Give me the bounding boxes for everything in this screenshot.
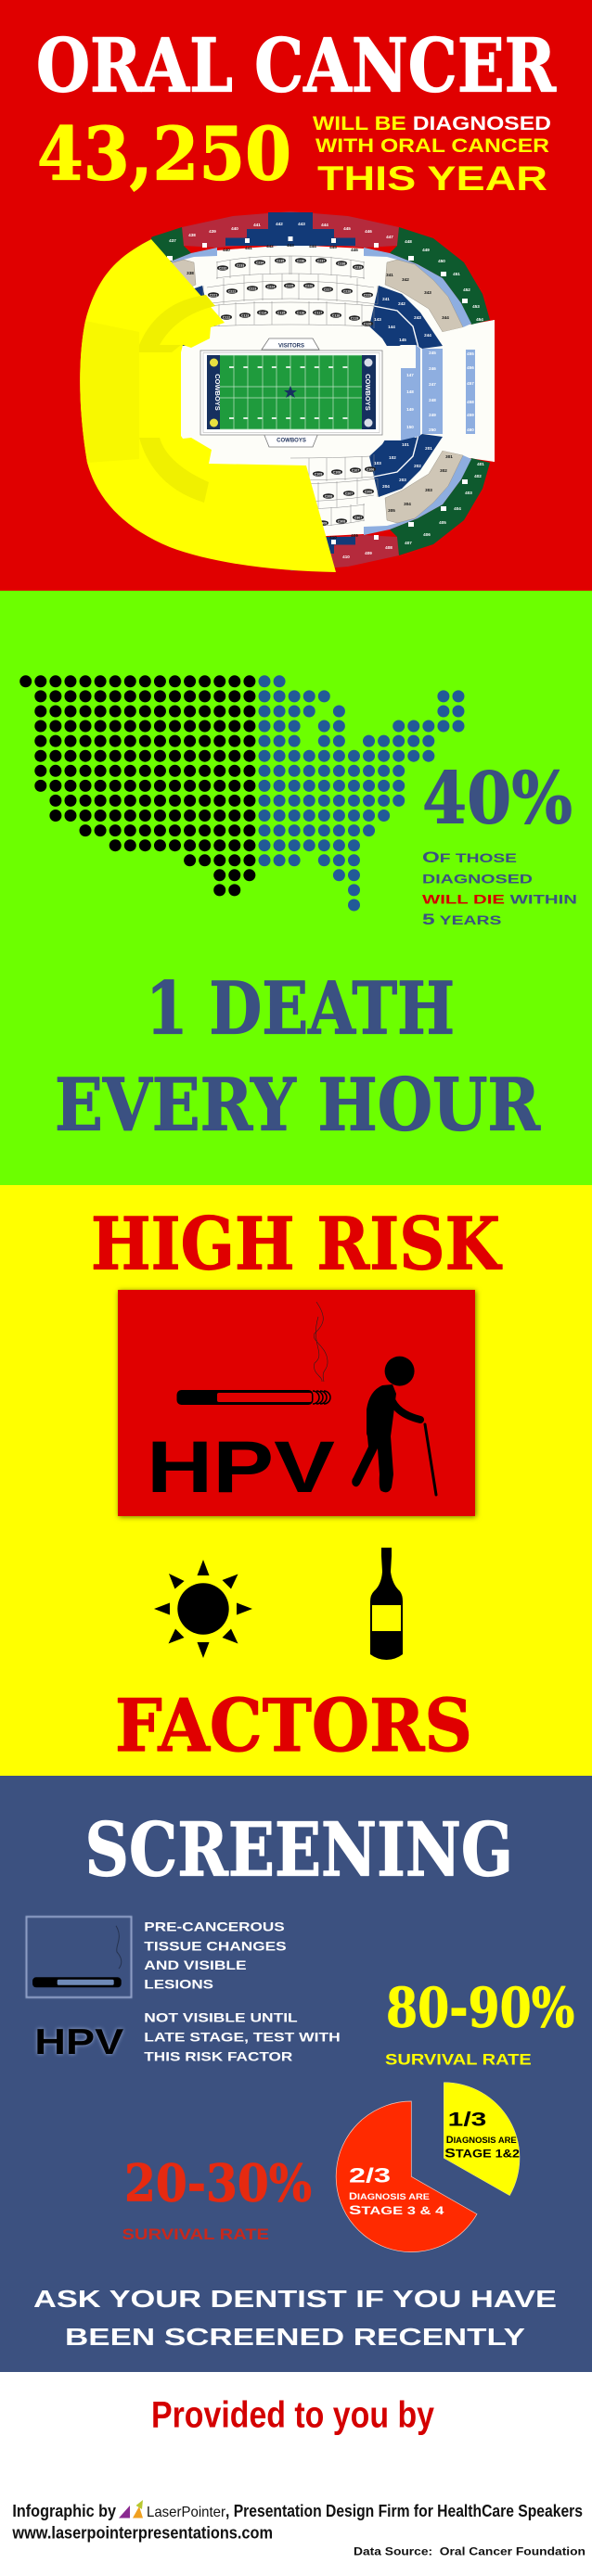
stadium seating map: 449: [422, 248, 430, 252]
stadium seating map: 248: [429, 398, 436, 402]
stadium seating map: 147: [406, 373, 414, 377]
call to action: ASK YOUR DENTIST IF YOU HAVE: [33, 2285, 557, 2313]
stadium seating map: 145: [399, 338, 406, 342]
stadium seating map: 441: [253, 223, 261, 227]
pie slice: stage 1 and 2: 1/3: [448, 2109, 486, 2130]
stadium seating map: 341: [386, 273, 393, 277]
call to action: [33, 2285, 557, 2351]
icon: elderly person with cane: [352, 1357, 436, 1495]
pie slice: stage 3 and 4: DIAGNOSIS ARE: [349, 2191, 430, 2202]
stadium seating map: 437: [169, 238, 176, 243]
HPV label: HPV: [34, 2022, 123, 2062]
stadium seating map: C308: [338, 519, 345, 523]
stadium seating map: 146: [407, 346, 415, 351]
stadium seating map: 450: [438, 259, 445, 263]
statistic caption: THIS YEAR: [317, 159, 547, 198]
stadium seating map: [80, 211, 495, 572]
stadium seating map: C115: [277, 311, 285, 314]
stadium seating map: 242: [398, 301, 405, 306]
stadium seating map: 442: [276, 222, 283, 226]
stadium seating map: 249: [429, 413, 436, 417]
screening notes: LATE STAGE, TEST WITH: [144, 2030, 341, 2045]
stadium seating map: 202: [414, 464, 421, 468]
stadium seating map: 438: [188, 233, 196, 237]
stadium seating map: C117: [315, 311, 322, 314]
blue dots: 40 percent: [264, 682, 458, 905]
stadium seating map: 402: [474, 474, 482, 478]
stadium seating map: C225: [286, 284, 293, 287]
panel: footer credits: [0, 2372, 592, 2576]
pie slice: stage 3 and 4: 2/3: [349, 2163, 391, 2187]
pie slice: stage 1 and 2: [444, 2083, 520, 2196]
stadium seating map: 343: [424, 290, 431, 295]
stadium seating map: C120: [364, 322, 371, 325]
stadium seating map: 150: [406, 425, 414, 429]
credit line: Infographic by: [12, 2501, 117, 2520]
stadium seating map: C235: [277, 259, 284, 262]
mortality caption: [422, 848, 577, 928]
statistic: 20-30% survival: [122, 2154, 312, 2243]
heading: factors: FACTORS: [115, 1684, 472, 1768]
stadium seating map: C107: [352, 468, 359, 472]
stadium seating map: C237: [317, 259, 325, 262]
stadium seating map: 410: [329, 535, 337, 540]
stadium seating map: 459: [467, 413, 474, 417]
panel: mortality: [0, 591, 592, 1185]
stadium seating map: 144: [388, 325, 395, 329]
pie slice: stage 3 and 4: S TAGE 3 & 4: [349, 2202, 444, 2217]
stadium seating map: 443: [287, 243, 294, 248]
stadium seating map: C113: [241, 313, 249, 317]
icon: bottle: [370, 1548, 403, 1660]
stadium seating map: 401: [477, 462, 484, 466]
mortality caption: 5 YEARS: [422, 911, 501, 928]
stadium seating map: 204: [382, 484, 390, 489]
stadium seating map: 245: [429, 351, 436, 355]
screening notes: THIS RISK FACTOR: [144, 2048, 292, 2063]
screening notes: TISSUE CHANGES: [144, 1938, 287, 1953]
stadium seating map: 148: [406, 389, 414, 394]
stadium seating map: 246: [429, 366, 436, 371]
stadium seating map: 406: [423, 532, 431, 537]
stadium seating map: C221: [210, 293, 217, 297]
mortality caption: O F THOSE: [422, 848, 517, 866]
stadium seating map: C206: [365, 490, 372, 493]
pie slice: stage 1 and 2: DIAGNOSIS ARE: [446, 2135, 517, 2146]
stadium seating map: 338: [187, 271, 194, 275]
stadium seating map: 305: [388, 508, 395, 513]
stadium seating map: 302: [440, 468, 447, 473]
heading: high risk: HIGH RISK: [91, 1202, 503, 1287]
stadium seating map: C112: [223, 315, 230, 319]
stadium seating map: COWBOYS: [213, 374, 222, 411]
stadium seating map: 244: [424, 333, 431, 338]
icon: sun: [154, 1560, 252, 1658]
statistic: 80-90% survival: [385, 1975, 574, 2069]
stadium seating map: 404: [454, 506, 461, 511]
stadium seating map: 410: [342, 555, 350, 559]
statistic: 40%: 40%: [422, 757, 573, 840]
dot map of the United States: [26, 682, 458, 905]
stadium seating map: 441: [245, 246, 252, 250]
stadium seating map: 405: [439, 520, 446, 525]
stadium seating map: 440: [223, 248, 230, 252]
stadium seating map: 457: [467, 381, 474, 386]
stadium seating map: C226: [305, 284, 313, 287]
statistic: 80-90% survival: SURVIVAL RATE: [385, 2051, 532, 2069]
call to action: BEEN SCREENED RECENTLY: [65, 2323, 525, 2351]
statistic: 20-30% survival: SURVIVAL RATE: [122, 2225, 269, 2243]
stadium seating map: C228: [343, 289, 351, 293]
stadium seating map: VISITORS: [278, 343, 304, 349]
credit line: www.laserpointerpresentations.com: [12, 2522, 273, 2542]
stadium seating map: C119: [351, 316, 358, 320]
statistic caption: WILL BE DIAGNOSED: [313, 113, 551, 134]
yellow highlighted seating share: [80, 239, 336, 572]
credit line: LaserPointer: [147, 2505, 226, 2520]
stadium seating map: 301: [445, 454, 453, 459]
stadium seating map: 446: [365, 229, 372, 234]
stadium seating map: C116: [297, 311, 304, 314]
stadium seating map: C232: [219, 266, 226, 270]
icon: cigarette: [176, 1302, 330, 1405]
stadium seating map: 453: [472, 304, 480, 309]
stadium seating map: 442: [266, 244, 274, 249]
screening notes: PRE-CANCEROUS: [144, 1919, 285, 1933]
stadium seating map: C239: [354, 265, 362, 269]
pie slice: stage 1 and 2: STAGE 1&2: [444, 2146, 520, 2161]
stadium seating map: 303: [425, 488, 432, 492]
statistic: 20-30% survival: 20-30%: [124, 2154, 312, 2214]
stadium seating map: 407: [405, 541, 412, 545]
pie slice: stage 3 and 4: [336, 2101, 477, 2252]
stadium seating map: C224: [267, 285, 275, 288]
stadium seating map: 439: [209, 229, 216, 234]
stadium seating map: C207: [345, 491, 353, 495]
stadium seating map: 460: [467, 427, 474, 432]
stadium seating map: 444: [309, 244, 316, 249]
stadium seating map: 247: [429, 382, 436, 387]
stadium seating map: 445: [343, 226, 351, 231]
stadium seating map: 241: [382, 297, 390, 301]
stadium seating map: C238: [338, 261, 345, 265]
stadium seating map: 458: [467, 400, 474, 404]
screening notes: LESIONS: [144, 1977, 213, 1992]
stadium seating map: 243: [414, 315, 421, 320]
stadium seating map: 201: [425, 446, 432, 451]
stadium seating map: 342: [402, 277, 409, 282]
stadium seating map: 149: [406, 407, 414, 412]
panel: oral cancer incidence: [0, 0, 592, 591]
stadium seating map: C233: [237, 263, 244, 267]
stadium seating map: C234: [256, 261, 264, 264]
stadium seating map: 143: [374, 317, 381, 322]
heading: 1 death every hour: 1 DEATH: [146, 966, 455, 1052]
stadium seating map: C109: [315, 472, 322, 476]
stadium seating map: 444: [321, 223, 328, 227]
stadium seating map: 452: [463, 287, 470, 292]
risk factor card: [118, 1290, 475, 1516]
stadium seating map: 408: [385, 545, 393, 550]
statistic: 43,250: 43,250: [37, 111, 291, 197]
stadium seating map: C114: [259, 311, 266, 314]
icon: laserpointer logo: [119, 2500, 143, 2519]
stadium seating map: 455: [467, 351, 474, 356]
stadium seating map: C223: [249, 287, 256, 290]
screening notes: [144, 1919, 341, 2063]
stadium seating map: 250: [429, 427, 436, 432]
heading: screening: SCREENING: [85, 1806, 513, 1894]
stadium seating map: C227: [324, 287, 331, 291]
screening notes: NOT VISIBLE UNTIL: [144, 2010, 298, 2025]
stadium seating map: C106: [367, 467, 374, 471]
mortality caption: WILL DIE WITHIN: [422, 892, 577, 907]
stadium seating map: 409: [351, 533, 358, 538]
panel: high risk factors: [0, 1185, 592, 1776]
stadium seating map: 102: [389, 455, 396, 460]
credit line: [12, 2500, 583, 2542]
stadium seating map: C222: [228, 289, 236, 293]
statistic caption: WITH ORAL CANCER: [315, 135, 549, 157]
stadium seating map: 409: [365, 551, 372, 555]
stadium seating map: 448: [405, 239, 412, 244]
stadium seating map: 103: [374, 461, 381, 465]
data source: Data Source: Oral Cancer Foundation: [354, 2546, 586, 2557]
stadium seating map: 403: [465, 491, 472, 495]
stadium seating map: 454: [476, 317, 483, 322]
stadium seating map: 451: [453, 272, 460, 276]
stadium seating map: C309: [319, 521, 327, 525]
stadium seating map: C208: [325, 494, 332, 498]
stadium seating map: 446: [351, 248, 358, 252]
stadium seating map: C236: [297, 259, 304, 262]
stadium seating map: COWBOYS: [364, 374, 372, 411]
stadium seating map: 447: [386, 235, 393, 239]
stadium seating map: 445: [329, 245, 337, 249]
statistic caption: [313, 113, 551, 198]
stadium seating map: 304: [404, 502, 411, 506]
screening notes: AND VISIBLE: [144, 1958, 247, 1972]
pie chart: stage at diagnosis: [336, 2083, 520, 2252]
stadium seating map: C118: [332, 313, 340, 317]
stadium seating map: C307: [354, 516, 362, 519]
provided by heading: Provided to you by: [151, 2395, 435, 2436]
icon: cigarette box: [26, 1917, 132, 1997]
stadium seating map: 203: [399, 478, 406, 482]
stadium seating map: 443: [298, 222, 305, 226]
stadium seating map: 440: [231, 226, 238, 231]
stadium seating map: 101: [402, 442, 409, 447]
HPV label: HPV: [147, 1425, 335, 1508]
stadium seating map: 344: [442, 315, 449, 320]
heading: 1 death every hour: [55, 966, 541, 1148]
stadium seating map: C229: [364, 293, 371, 297]
stadium seating map: COWBOYS: [277, 438, 306, 443]
panel: screening: [0, 1776, 592, 2372]
stadium seating map: 456: [467, 365, 474, 370]
mortality caption: DIAGNOSED: [422, 872, 533, 886]
stadium seating map: C108: [333, 470, 341, 474]
black dots: 60 percent: [26, 682, 250, 890]
